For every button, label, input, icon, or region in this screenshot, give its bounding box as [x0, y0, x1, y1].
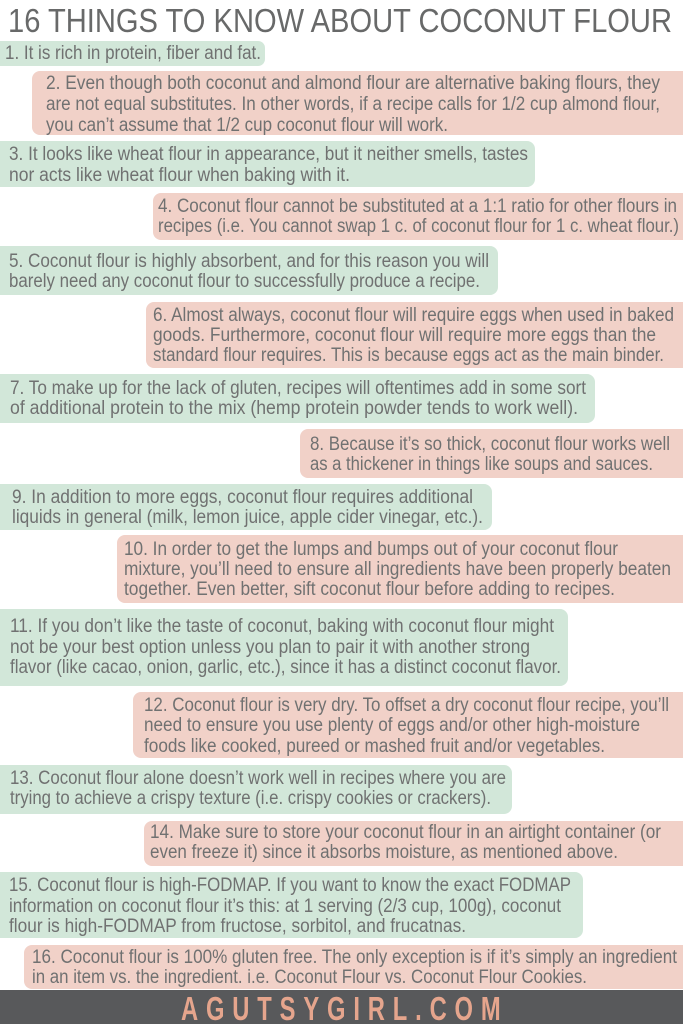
- item 13: trying to achieve a crispy texture (i.e. crispy cookies or crackers).: [10, 788, 491, 809]
- item 7: of additional protein to the mix (hemp protein powder tends to work well).: [10, 398, 578, 419]
- item 15: [0, 872, 583, 938]
- item 3: 3. It looks like wheat flour in appearance, but it neither smells, tastes: [9, 144, 528, 165]
- item 10: [117, 535, 683, 603]
- item 5: barely need any coconut flour to successfully produce a recipe.: [9, 271, 480, 292]
- item 2: you can’t assume that 1/2 cup coconut flour will work.: [46, 115, 448, 136]
- item 15: 15. Coconut flour is high-FODMAP. If you want to know the exact FODMAP: [9, 875, 571, 896]
- item 10: 10. In order to get the lumps and bumps out of your coconut flour: [124, 539, 619, 560]
- item 13: 13. Coconut flour alone doesn’t work well in recipes where you are: [10, 768, 506, 789]
- item 16: in an item vs. the ingredient. i.e. Coconut Flour vs. Coconut Flour Cookies.: [32, 967, 587, 988]
- item 11: flavor (like cacao, onion, garlic, etc.), since it has a distinct coconut flavor.: [10, 657, 561, 678]
- item 2: [32, 71, 683, 136]
- item 3: nor acts like wheat flour when baking with it.: [9, 165, 350, 186]
- item 4: [153, 193, 683, 240]
- item 9: 9. In addition to more eggs, coconut flour requires additional: [12, 487, 473, 508]
- item 15: flour is high-FODMAP from fructose, sorbitol, and frucatnas.: [9, 916, 466, 937]
- item 11: [0, 609, 568, 686]
- item 12: need to ensure you use plenty of eggs and/or other high-moisture: [144, 715, 640, 736]
- item 5: 5. Coconut flour is highly absorbent, and for this reason you will: [9, 251, 489, 272]
- item 8: [300, 429, 683, 478]
- item 7: 7. To make up for the lack of gluten, recipes will oftentimes add in some sort: [10, 378, 587, 399]
- item 3: [0, 141, 535, 187]
- item 9: [0, 484, 492, 530]
- item 6: [146, 302, 683, 368]
- item 14: even freeze it) since it absorbs moisture, as mentioned above.: [150, 842, 618, 863]
- item 10: together. Even better, sift coconut flour before adding to recipes.: [124, 579, 615, 600]
- item 7: [0, 374, 595, 423]
- item 9: liquids in general (milk, lemon juice, apple cider vinegar, etc.).: [12, 507, 483, 528]
- item 13: [0, 765, 512, 814]
- item 1: 1. It is rich in protein, fiber and fat.: [5, 43, 261, 64]
- item 12: [133, 692, 683, 758]
- item 14: [144, 821, 683, 866]
- item 16: [24, 945, 683, 989]
- item 11: not be your best option unless you plan to pair it with another strong: [10, 637, 530, 658]
- item 5: [0, 246, 498, 295]
- item 12: foods like cooked, pureed or mashed fruit and/or vegetables.: [144, 736, 605, 757]
- item 15: information on coconut flour it’s this: at 1 serving (2/3 cup, 100g), coconut: [9, 896, 562, 917]
- footer band: [0, 990, 683, 1024]
- item 11: 11. If you don’t like the taste of coconut, baking with coconut flour might: [10, 616, 555, 637]
